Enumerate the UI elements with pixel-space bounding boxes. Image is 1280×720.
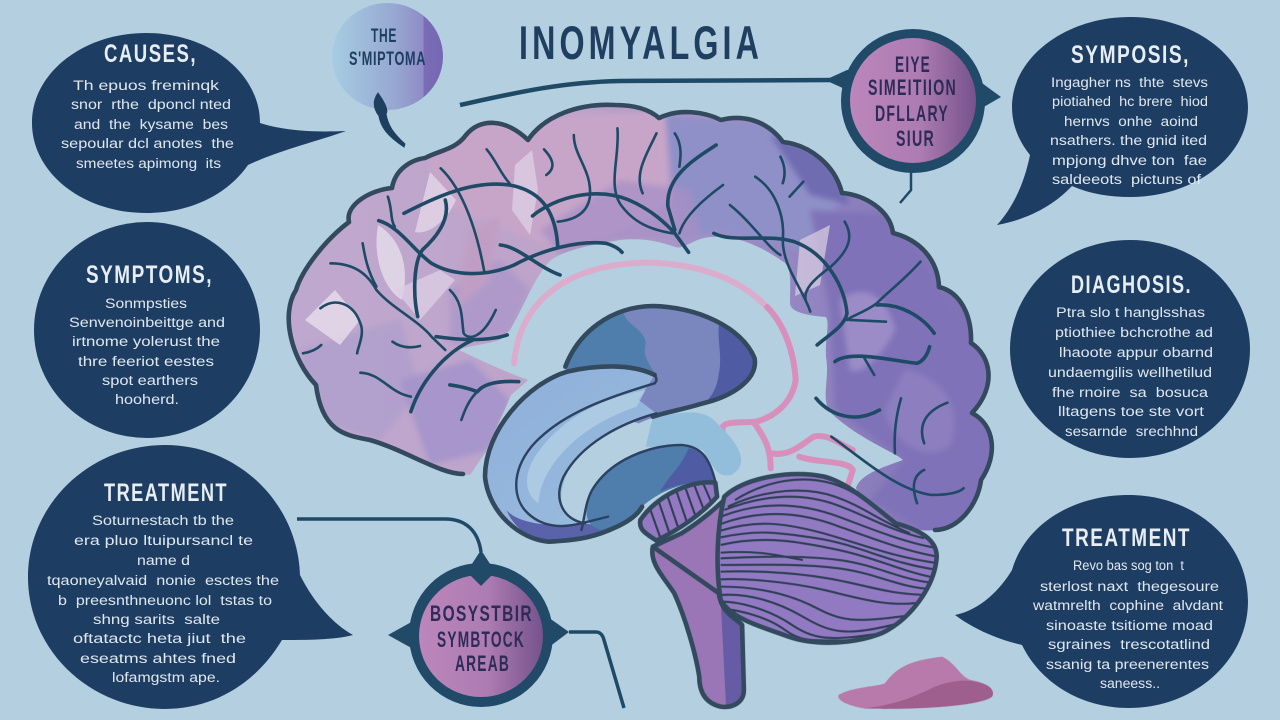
text block: symptoms: irtnome yolerust the: [72, 334, 220, 349]
text block: symptoms: hooherd.: [115, 392, 179, 407]
bubble: diagnosis: [1010, 240, 1250, 458]
callout label: [349, 26, 426, 70]
callout label: S'MIPTOMA: [349, 49, 426, 70]
ring: [409, 563, 553, 707]
text block: symptoms: Sonmpsties: [105, 296, 187, 311]
panel: treatment left: [28, 445, 353, 709]
text block: symptoms: spot earthers: [102, 373, 198, 388]
text block: symposis: nsathers. the gnid ited: [1050, 133, 1207, 148]
text block: symposis: saldeeots pictuns of: [1052, 172, 1201, 187]
text block: treatment left: [47, 513, 279, 685]
text block: diagnosis: [1048, 305, 1213, 439]
corpus body: [565, 306, 755, 423]
connector lines: [297, 519, 624, 708]
cerebrum: [289, 105, 1000, 535]
heading: treatment left: TREATMENT: [104, 479, 228, 507]
inner notch: [469, 574, 493, 586]
text block: treatment right: Revo bas sog ton t: [1073, 558, 1184, 573]
text block: diagnosis: ptiothiee bchcrothe ad: [1055, 325, 1213, 340]
speech bubble: treatment left: [28, 445, 353, 709]
cerebellum: [718, 474, 939, 643]
limbic structures: [485, 306, 755, 542]
callout label: THE: [371, 26, 397, 47]
heading: symptoms: SYMPTOMS,: [86, 261, 213, 289]
C-shaped fold: [485, 366, 715, 542]
text block: diagnosis: sesarnde srechhnd: [1065, 424, 1198, 439]
inner disc: [850, 38, 976, 163]
text block: symposis: hernvs onhe aoind: [1064, 114, 1198, 129]
text block: treatment right: sinoaste tsitiome moad: [1046, 618, 1213, 633]
text block: treatment right: sgraines trescotatlind: [1048, 637, 1210, 652]
pink mound: [838, 657, 993, 709]
panel: causes: [32, 33, 346, 213]
text block: diagnosis: Ptra slo t hanglsshas: [1056, 305, 1205, 320]
text block: treatment right: saneess..: [1100, 676, 1160, 691]
text block: symptoms: [69, 296, 225, 407]
speech bubble: causes: [32, 33, 346, 213]
ring: [841, 29, 985, 173]
text block: symposis: [1050, 75, 1208, 187]
callout: eye simetition: [460, 29, 1001, 203]
callout label: [430, 601, 533, 676]
heading: causes: CAUSES,: [104, 40, 197, 68]
text block: treatment right: watmrelth cophine alvdant: [1032, 598, 1223, 613]
text block: symposis: Ingagher ns thte stevs: [1051, 75, 1208, 90]
text block: causes: snor rthe dponcl nted: [71, 97, 231, 112]
text block: treatment right: [1032, 558, 1223, 691]
cerebrum outline: [289, 105, 992, 530]
text block: treatment left: tqaoneyalvaid nonie esctes the: [47, 573, 279, 588]
panel: diagnosis: [1010, 240, 1250, 458]
callout: body system: [297, 519, 624, 708]
title: INOMYALGIA: [519, 16, 763, 69]
brain stem: [652, 497, 744, 707]
callout: the symptoma: [332, 3, 443, 147]
text block: treatment left: oftatactc heta jiut the: [73, 631, 246, 646]
inner disc: [419, 575, 543, 697]
panel: treatment right: [955, 495, 1248, 708]
text block: diagnosis: undaemgilis wellhetilud: [1048, 365, 1212, 380]
heading: symposis: SYMPOSIS,: [1071, 41, 1190, 69]
text block: symposis: piotiahed hc brere hiod: [1052, 94, 1208, 109]
light blue blob: [646, 412, 741, 476]
callout label: SIUR: [896, 126, 935, 151]
connector line: [460, 80, 835, 105]
callout pointer: [374, 93, 405, 147]
pons: [640, 482, 717, 541]
text block: treatment right: ssanig ta preenerentes: [1046, 657, 1209, 672]
text block: treatment right: sterlost naxt thegesoure: [1040, 579, 1219, 594]
text block: treatment left: era pluo ltuipursancl te: [74, 533, 253, 548]
cerebrum veins: [303, 128, 934, 420]
callout label: DFLLARY: [875, 101, 949, 126]
bubble: symptoms: [34, 222, 260, 438]
text block: diagnosis: lhaoote appur obarnd: [1059, 345, 1213, 360]
text block: causes: Th epuos freminqk: [73, 78, 219, 93]
panel: symptoms: [34, 222, 260, 438]
text block: symptoms: thre feeriot eestes: [78, 354, 214, 369]
pink nerve pathway: [514, 263, 853, 487]
callout label: SYMBTOCK: [437, 627, 525, 652]
text block: treatment left: name d: [137, 553, 190, 568]
brain illustration: [289, 105, 1000, 709]
speech bubble: symposis: [997, 17, 1248, 225]
text block: diagnosis: fhe rnoire sa bosuca: [1052, 385, 1209, 400]
callout label: [868, 52, 957, 151]
callout label: EIYE: [895, 52, 931, 77]
right lobe veins: [816, 347, 964, 503]
text block: diagnosis: lltagens toe ste vort: [1058, 404, 1204, 419]
text block: symptoms: Senvenoinbeittge and: [69, 315, 225, 330]
callout disc: [332, 3, 443, 110]
text block: treatment left: shng sarits salte: [93, 612, 220, 627]
text block: causes: sepoular dcl anotes the: [61, 136, 234, 151]
text block: causes: [61, 78, 234, 171]
speech bubble: treatment right: [955, 495, 1248, 708]
text block: treatment left: Soturnestach tb the: [92, 513, 234, 528]
text block: treatment left: b preesnthneuonc lol tstas to: [58, 593, 272, 608]
panel: symposis: [997, 17, 1248, 225]
pons and brain stem: [640, 474, 993, 709]
ring with side points: [825, 70, 1001, 112]
text block: treatment left: eseatms ahtes fned: [80, 651, 236, 666]
callout label: AREAB: [455, 651, 510, 676]
heading: diagnosis: DIAGHOSIS.: [1071, 271, 1192, 299]
text block: symposis: mpjong dhve ton fae: [1052, 153, 1207, 168]
lower pointer: [900, 165, 911, 203]
callout label: SIMEITIION: [868, 75, 957, 100]
heading: treatment right: TREATMENT: [1062, 524, 1191, 552]
ring points: [388, 550, 569, 650]
callout label: BOSYSTBIR: [430, 601, 533, 626]
text block: causes: and the kysame bes: [74, 117, 228, 132]
text block: causes: smeetes apimong its: [76, 156, 221, 171]
text block: treatment left: lofamgstm ape.: [112, 670, 220, 685]
